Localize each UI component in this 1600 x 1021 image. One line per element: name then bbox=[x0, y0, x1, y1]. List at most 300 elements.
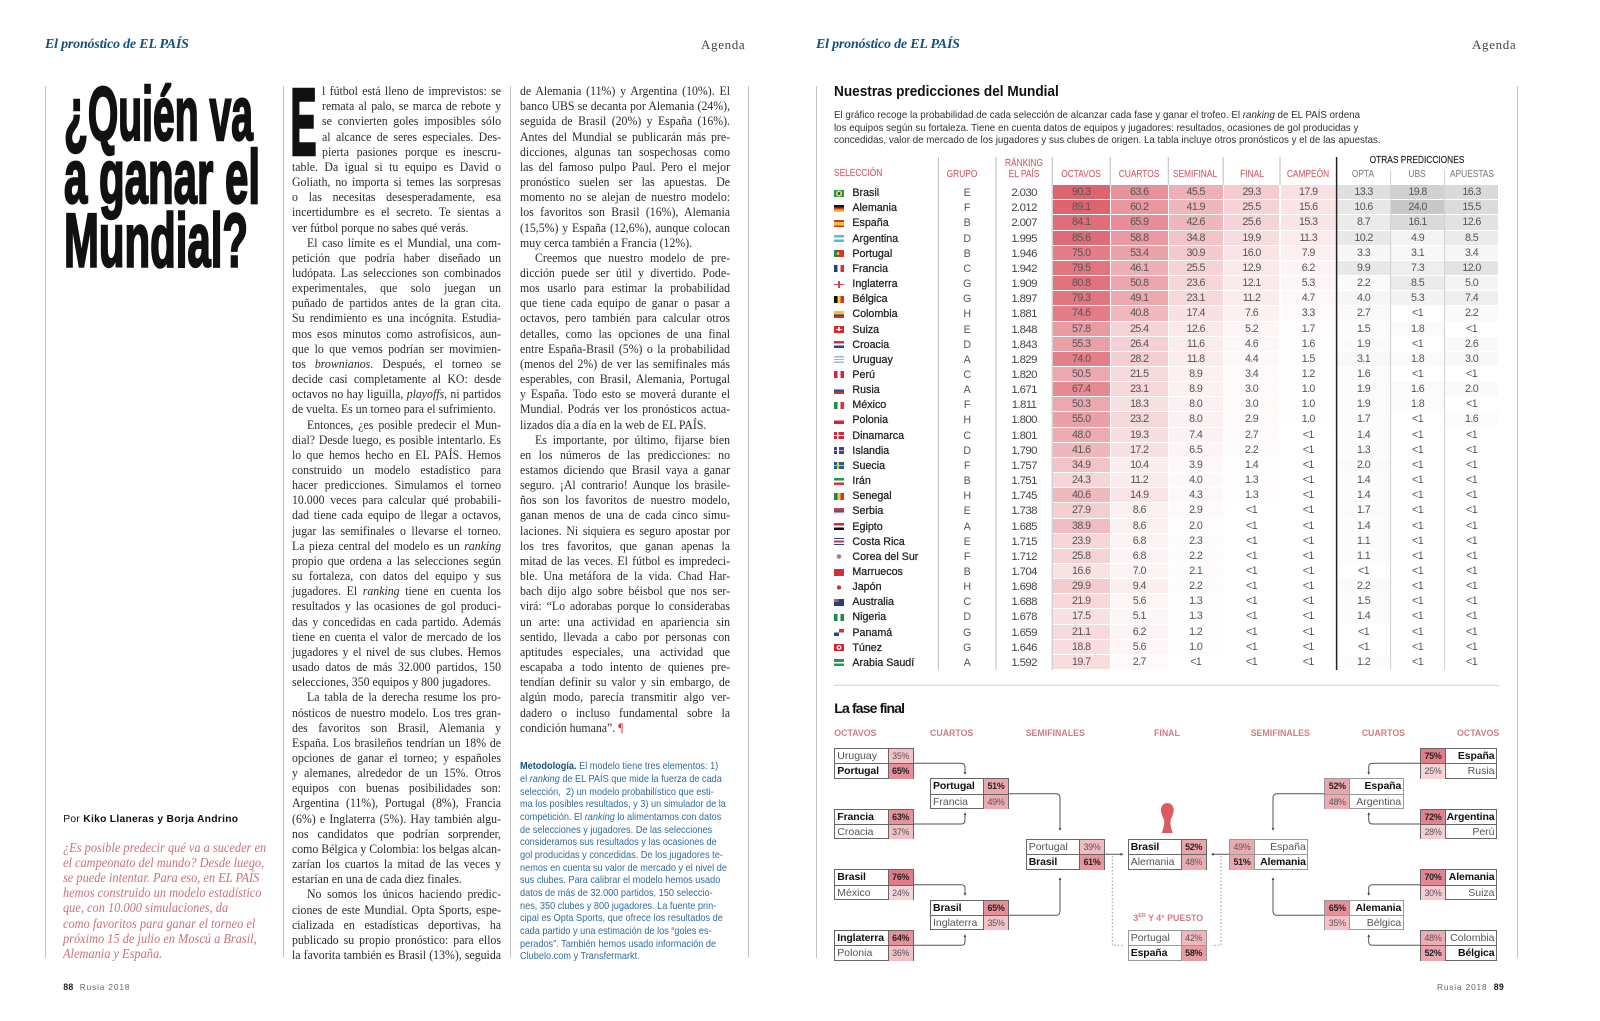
row: Brasil: 19.8 bbox=[1408, 186, 1427, 198]
row: Suiza: 1.5 bbox=[1357, 322, 1370, 334]
row: Bélgica: 4.0 bbox=[1357, 292, 1370, 304]
row: Senegal: 1.3 bbox=[1245, 489, 1258, 501]
article text column 1: jugadores y el nivel de sus clubes. Hemos bbox=[292, 644, 501, 659]
methodology note: de selecciones y jugadores. De las selecciones bbox=[520, 825, 712, 836]
right page folio: Rusia 2018 89 bbox=[1437, 982, 1504, 992]
row: Túnez: G bbox=[963, 642, 971, 654]
row: Irán: B bbox=[964, 475, 971, 487]
arrow: Alemania to final bbox=[1212, 853, 1229, 855]
methodology note: gol producidas y concedidas. De los jugadores te- bbox=[520, 850, 722, 861]
row: Croacia: 26.4 bbox=[1130, 338, 1148, 350]
row: Corea del Sur: 2.2 bbox=[1189, 550, 1202, 562]
intro text in pink italics: Alemania y España. bbox=[63, 947, 163, 962]
row: Portugal: 3.4 bbox=[1465, 247, 1478, 259]
article text column 1: dial? Desde luego, es posible intentarlo. Es bbox=[292, 432, 501, 447]
row: Dinamarca: <1 bbox=[1412, 429, 1423, 441]
row: Suiza: 1.848 bbox=[1011, 324, 1037, 336]
row: España: 12.6 bbox=[1462, 216, 1481, 228]
article text column 2: sentido, llevada a cabo por personas con bbox=[520, 629, 730, 644]
row: Alemania: 24.0 bbox=[1408, 201, 1427, 213]
row: Francia: 7.3 bbox=[1411, 262, 1424, 274]
row: Corea del Sur: <1 bbox=[1303, 550, 1314, 562]
row: Argentina: 11.3 bbox=[1299, 232, 1317, 244]
row: Australia: 1.3 bbox=[1189, 595, 1202, 607]
row: Panamá: G bbox=[963, 627, 971, 639]
row: Colombia: Colombia bbox=[852, 308, 898, 320]
row: Australia bbox=[834, 594, 1478, 608]
row: Inglaterra: 23.6 bbox=[1186, 277, 1205, 289]
match: Portugal vs Francia: Francia bbox=[933, 796, 968, 808]
match: España vs Rusia: 75% bbox=[1424, 751, 1442, 761]
row: Costa Rica: 1.1 bbox=[1357, 535, 1370, 547]
match: Brasil vs Inglaterra: 35% bbox=[987, 918, 1004, 928]
arrow: España loser to third place bbox=[1212, 856, 1221, 945]
match: Uruguay vs Portugal: 65% bbox=[892, 766, 909, 776]
row: Suiza: 12.6 bbox=[1186, 322, 1205, 334]
article text column 1: y alemanes, alrededor de un 15%. Otros bbox=[292, 765, 501, 780]
row: Arabia Saudí: 1.2 bbox=[1357, 656, 1370, 668]
row: Francia: 12.0 bbox=[1462, 262, 1481, 274]
icon: World Cup trophy bbox=[1161, 803, 1174, 833]
row: Senegal: 1.4 bbox=[1357, 489, 1370, 501]
row: Francia bbox=[834, 261, 1498, 275]
match: España vs Argentina: España bbox=[1365, 780, 1401, 792]
row: Suecia: <1 bbox=[1466, 459, 1477, 471]
row: México: 1.811 bbox=[1012, 399, 1036, 411]
match: Portugal vs Brasil: 39% bbox=[1083, 842, 1100, 852]
row: Francia: Francia bbox=[852, 263, 888, 275]
row: Senegal: 40.6 bbox=[1072, 489, 1090, 501]
bracket label: final: FINAL bbox=[1154, 728, 1180, 738]
row: Irán: 4.0 bbox=[1189, 474, 1202, 486]
article text column 1: l fútbol está lleno de imprevistos: se bbox=[322, 83, 501, 98]
article text column 1: zarían los cuartos la mitad de las veces y bbox=[292, 856, 501, 871]
match: Alemania vs Bélgica: 65% bbox=[1329, 903, 1346, 913]
row: España: España bbox=[852, 217, 889, 229]
row: Nigeria: 1.4 bbox=[1357, 610, 1370, 622]
article text column 1: jugadores. El ranking tiene en cuenta los bbox=[292, 583, 501, 598]
row: Nigeria: <1 bbox=[1303, 610, 1314, 622]
match: Argentina vs Perú: Argentina bbox=[1447, 811, 1494, 823]
methodology note: ma los posibles resultados, y 3) un simulador de la bbox=[520, 799, 725, 810]
match: Francia vs Croacia bbox=[834, 809, 914, 839]
row: Suecia: 3.9 bbox=[1189, 459, 1202, 471]
row: Japón: H bbox=[963, 581, 971, 593]
row: Brasil: 16.3 bbox=[1462, 186, 1481, 198]
row: Islandia: 41.6 bbox=[1072, 444, 1090, 456]
row: Marruecos: Marruecos bbox=[852, 566, 903, 578]
row: Panamá: 1.2 bbox=[1189, 626, 1202, 638]
match: Brasil vs Inglaterra: 65% bbox=[987, 903, 1004, 913]
row: Polonia: 1.800 bbox=[1011, 414, 1037, 426]
intro text in pink italics: que, con 10.000 simulaciones, da bbox=[63, 901, 228, 916]
match: Brasil vs México: México bbox=[837, 887, 871, 899]
article text column 1: la favorita también es Brasil (13%), seguida bbox=[292, 947, 501, 962]
article text column 1: petición que podría haber diseñado un bbox=[292, 250, 501, 265]
row: Senegal: Senegal bbox=[852, 490, 892, 502]
match: Uruguay vs Portugal: Portugal bbox=[837, 765, 879, 777]
row: Suecia: <1 bbox=[1412, 459, 1423, 471]
row: Alemania: 15.5 bbox=[1462, 201, 1481, 213]
row: Irán: Irán bbox=[852, 475, 871, 487]
row: Alemania: 25.5 bbox=[1242, 201, 1261, 213]
row: Suiza: 5.2 bbox=[1245, 322, 1258, 334]
row: Islandia: <1 bbox=[1303, 444, 1314, 456]
methodology note: nemos en cuenta su valor de mercado y el nivel de bbox=[520, 863, 726, 874]
row: Argentina: 19.9 bbox=[1242, 232, 1261, 244]
match: third place Portugal vs España: 58% bbox=[1185, 948, 1202, 958]
row: Nigeria: 5.1 bbox=[1133, 610, 1146, 622]
row: Japón: <1 bbox=[1246, 580, 1257, 592]
row: Rusia bbox=[834, 382, 1478, 396]
row: Marruecos: <1 bbox=[1466, 565, 1477, 577]
article text column 1: Su rendimiento es una incógnita. Estudia- bbox=[292, 310, 501, 325]
article text column 1: propio que ordena a las selecciones según bbox=[292, 553, 501, 568]
row: Bélgica: 5.3 bbox=[1411, 292, 1424, 304]
row: Senegal: 1.745 bbox=[1011, 490, 1037, 502]
article text column 1: construido un modelo estadístico para bbox=[292, 462, 501, 477]
methodology note bbox=[520, 761, 727, 962]
row: Argentina: Argentina bbox=[852, 233, 898, 245]
row: Uruguay: 1.8 bbox=[1411, 353, 1424, 365]
row: Bélgica: 79.3 bbox=[1072, 292, 1090, 304]
row: Serbia: 1.738 bbox=[1011, 505, 1037, 517]
arrow: Brasil to final bbox=[1105, 853, 1123, 855]
article text column 1: opciones de ganar el torneo; y españoles bbox=[292, 750, 501, 765]
row: España: 15.3 bbox=[1299, 216, 1317, 228]
row: Colombia: 2.7 bbox=[1357, 307, 1370, 319]
match: Alemania vs Suiza: 30% bbox=[1424, 888, 1442, 898]
row: Portugal: 1.946 bbox=[1011, 248, 1037, 260]
row: Serbia: 27.9 bbox=[1072, 504, 1090, 516]
row: Brasil: E bbox=[964, 187, 971, 199]
match: Brasil vs Inglaterra bbox=[930, 900, 1009, 930]
row: Croacia: Croacia bbox=[852, 339, 889, 351]
article text column 2: ble. Una metáfora de la vida. Chad Har- bbox=[520, 568, 730, 583]
row: Serbia: <1 bbox=[1303, 504, 1314, 516]
methodology note: perados”. También hemos usado información de bbox=[520, 939, 716, 950]
row: Argentina: 8.5 bbox=[1465, 232, 1478, 244]
match: Uruguay vs Portugal: Uruguay bbox=[837, 750, 877, 762]
row: Colombia: 2.2 bbox=[1465, 307, 1478, 319]
row: Francia: 79.5 bbox=[1072, 262, 1090, 274]
row: Argentina: 34.8 bbox=[1186, 232, 1205, 244]
row: España bbox=[834, 215, 1498, 230]
article text column 2: seguro. ¡Al contrario! Aunque los brasile- bbox=[520, 477, 730, 492]
article text column 2: de Alemania (11%) y Argentina (10%). El bbox=[520, 83, 730, 98]
arrow: Portugal loser to third place bbox=[1112, 856, 1123, 945]
row: Islandia: Islandia bbox=[852, 445, 889, 457]
row: Dinamarca: Dinamarca bbox=[852, 430, 904, 442]
match: Brasil vs Inglaterra: Brasil bbox=[933, 902, 961, 914]
predictions table bbox=[834, 185, 1498, 669]
row: Dinamarca: 1.801 bbox=[1011, 430, 1037, 442]
row: Uruguay: 4.4 bbox=[1245, 353, 1258, 365]
match: Alemania vs Bélgica: Alemania bbox=[1355, 902, 1401, 914]
left page running head: El pronóstico de EL PAÍS bbox=[45, 36, 189, 52]
row: Irán bbox=[834, 473, 1478, 487]
row: Polonia: 1.6 bbox=[1465, 413, 1478, 425]
article text column 1: octavos no hay liguilla, playoffs, ni partidos bbox=[292, 386, 501, 401]
match: Alemania vs Suiza: 70% bbox=[1424, 872, 1442, 882]
methodology note: Clubelo.com y Transfermarkt. bbox=[520, 951, 639, 962]
row: Perú: Perú bbox=[852, 369, 875, 381]
article text column 2: pronóstico suelen ser las apuestas. De bbox=[520, 174, 730, 189]
row: Alemania: 15.6 bbox=[1299, 201, 1317, 213]
article text column 1: table. Da igual si tu equipo es David o bbox=[292, 159, 501, 174]
article text column 1: puñado de partidos antes de la gran cita. bbox=[292, 295, 501, 310]
row: Bélgica: 11.2 bbox=[1243, 292, 1260, 304]
row: Irán: <1 bbox=[1303, 474, 1314, 486]
row: México: 1.0 bbox=[1302, 398, 1315, 410]
row: Costa Rica: 2.3 bbox=[1189, 535, 1202, 547]
row: Colombia: H bbox=[963, 308, 971, 320]
row: Croacia: 1.6 bbox=[1302, 338, 1315, 350]
match: Uruguay vs Portugal: 35% bbox=[892, 751, 909, 761]
row: México: 3.0 bbox=[1245, 398, 1258, 410]
row: Uruguay: 3.0 bbox=[1465, 353, 1478, 365]
row: Nigeria: D bbox=[963, 611, 971, 623]
row: España: 65.9 bbox=[1130, 216, 1148, 228]
row: México bbox=[834, 397, 1478, 411]
row: Perú: 50.5 bbox=[1072, 368, 1090, 380]
row: Costa Rica: E bbox=[964, 536, 971, 548]
table description: concedidas, valor de mercado de los jugadores y sus clubes de origen. La tabla incluye otros pronósticos y el de las apuestas. bbox=[834, 134, 1381, 146]
row: Suecia: 10.4 bbox=[1130, 459, 1148, 471]
row: Australia: <1 bbox=[1303, 595, 1314, 607]
article text column 1: remata al palo, se marca de rebote y bbox=[322, 98, 501, 113]
article text column 2 bbox=[520, 83, 730, 735]
article text column 2: ños son los favoritos de nuestro modelo, bbox=[520, 492, 730, 507]
row: Marruecos: 7.0 bbox=[1133, 565, 1146, 577]
row: México: 1.9 bbox=[1357, 398, 1370, 410]
row: Egipto: A bbox=[964, 521, 971, 533]
article text column 2: muy cerca también a Francia (12%). bbox=[520, 235, 692, 250]
row: Costa Rica: <1 bbox=[1466, 535, 1477, 547]
row: Australia: C bbox=[963, 596, 971, 608]
intro text in pink italics: el campeonato del mundo? Desde luego, bbox=[63, 856, 264, 871]
article text column 1: El caso límite es el Mundial, una com- bbox=[307, 235, 501, 250]
row: Australia: 1.688 bbox=[1011, 596, 1037, 608]
row: Bélgica: 49.1 bbox=[1130, 292, 1148, 304]
match: Inglaterra vs Polonia bbox=[834, 930, 914, 961]
match: third place Portugal vs España bbox=[1128, 930, 1207, 961]
row: México: <1 bbox=[1466, 398, 1477, 410]
arrow: España to quarter-final bbox=[1369, 763, 1420, 774]
row: Bélgica: 4.7 bbox=[1302, 292, 1315, 304]
row: Senegal: <1 bbox=[1303, 489, 1314, 501]
row: Inglaterra: 50.8 bbox=[1130, 277, 1148, 289]
match: Colombia vs Bélgica: 48% bbox=[1424, 933, 1442, 943]
match: Colombia vs Bélgica bbox=[1420, 930, 1497, 961]
match: Francia vs Croacia: Croacia bbox=[837, 826, 873, 838]
row: Japón: 2.2 bbox=[1189, 580, 1202, 592]
row: Arabia Saudí bbox=[834, 655, 1499, 670]
match: Inglaterra vs Polonia: Inglaterra bbox=[837, 932, 884, 944]
row: Inglaterra: 80.8 bbox=[1072, 277, 1090, 289]
row: Uruguay: 74.0 bbox=[1072, 353, 1090, 365]
row: Panamá: <1 bbox=[1466, 626, 1477, 638]
article text column 1: incertidumbre es el secreto. Te sientas a bbox=[292, 204, 501, 219]
row: Marruecos: 1.704 bbox=[1011, 566, 1037, 578]
row: Perú: <1 bbox=[1412, 368, 1423, 380]
row: Suecia: 1.757 bbox=[1011, 460, 1037, 472]
article text column 1: ludópata. Las selecciones son combinados bbox=[292, 265, 501, 280]
table column headers: SELECCIÓN bbox=[834, 168, 883, 179]
row: Australia: 1.5 bbox=[1357, 595, 1370, 607]
article text column 1: 10.000 veces para calcular qué probabili- bbox=[292, 492, 501, 507]
article text column 2: bach dijo algo sobre béisbol que nos ser- bbox=[520, 583, 730, 598]
article text column 1: estarían en una de cada diez finales. bbox=[292, 871, 462, 886]
row: Croacia bbox=[834, 337, 1478, 351]
byline: Por Kiko Llaneras y Borja Andrino bbox=[63, 814, 238, 825]
row: España: 2.007 bbox=[1011, 217, 1037, 229]
row: Túnez: <1 bbox=[1303, 641, 1314, 653]
row: Alemania: 2.012 bbox=[1011, 202, 1037, 214]
row: Argentina: D bbox=[963, 233, 971, 245]
article text column 1: lo que hemos hecho en EL PAÍS. Hemos bbox=[292, 447, 501, 462]
match: España vs Alemania: España bbox=[1270, 841, 1306, 853]
row: Dinamarca: 19.3 bbox=[1130, 429, 1148, 441]
row: Croacia: D bbox=[963, 339, 971, 351]
match: España vs Argentina: 48% bbox=[1329, 797, 1346, 807]
row: Islandia: 1.3 bbox=[1357, 444, 1370, 456]
match: Portugal vs Francia: 49% bbox=[987, 797, 1004, 807]
article text column 1: su fortaleza, con datos del equipo y sus bbox=[292, 568, 501, 583]
row: Túnez: <1 bbox=[1246, 641, 1257, 653]
row: Corea del Sur: F bbox=[964, 551, 970, 563]
row: Inglaterra: 8.5 bbox=[1411, 277, 1424, 289]
match: España vs Argentina: Argentina bbox=[1356, 796, 1401, 808]
row: Uruguay: 28.2 bbox=[1130, 353, 1148, 365]
row: México: 8.0 bbox=[1189, 398, 1202, 410]
row: Islandia: 1.790 bbox=[1011, 445, 1037, 457]
article text column 2: mos usarlo para estimar la probabilidad bbox=[520, 280, 730, 295]
table title: Nuestras predicciones del Mundial bbox=[834, 83, 1059, 100]
row: Suecia: 34.9 bbox=[1072, 459, 1090, 471]
row: Túnez: <1 bbox=[1412, 641, 1423, 653]
article text column 2: estamos diciendo que Brasil vaya a ganar bbox=[520, 462, 730, 477]
match: Alemania vs Suiza: Suiza bbox=[1468, 887, 1494, 899]
match: Alemania vs Suiza: Alemania bbox=[1449, 871, 1494, 883]
row: Inglaterra: 1.909 bbox=[1011, 278, 1037, 290]
row: Islandia: 2.2 bbox=[1245, 444, 1258, 456]
row: Australia: 5.6 bbox=[1133, 595, 1146, 607]
row: Panamá: <1 bbox=[1358, 626, 1369, 638]
intro text in pink italics: próximo 15 de julio en Moscú a Brasil, bbox=[63, 932, 257, 947]
methodology note: cada partido y una estimación de los “goles es- bbox=[520, 926, 711, 937]
article text column 1: ciones de este Mundial. Opta Sports, espe- bbox=[292, 902, 501, 917]
row: Perú: 1.2 bbox=[1302, 368, 1315, 380]
row: Argentina: 4.9 bbox=[1411, 232, 1424, 244]
row: Rusia: Rusia bbox=[852, 384, 880, 396]
table description: El gráfico recoge la probabilidad de cada selección de alcanzar cada fase y ganar el trofeo. El ranking de EL PAÍS ordena bbox=[834, 109, 1360, 121]
row: Rusia: A bbox=[964, 384, 971, 396]
row: Senegal: 14.9 bbox=[1130, 489, 1148, 501]
row: Polonia: 2.9 bbox=[1245, 413, 1258, 425]
article text column 2: seguida de Brasil (20%) y España (16%). bbox=[520, 113, 730, 128]
match: final Brasil vs Alemania: Brasil bbox=[1131, 841, 1159, 853]
row: Costa Rica: <1 bbox=[1303, 535, 1314, 547]
row: Croacia: <1 bbox=[1412, 338, 1423, 350]
match: Francia vs Croacia: Francia bbox=[837, 811, 874, 823]
row: España: 16.1 bbox=[1408, 216, 1427, 228]
row: Croacia: 11.6 bbox=[1187, 338, 1205, 350]
row: Marruecos: <1 bbox=[1412, 565, 1423, 577]
article text column 1: España. Los brasileños tendrían un 18% de bbox=[292, 735, 501, 750]
row: España: 42.6 bbox=[1186, 216, 1205, 228]
article text column 1: La tabla de la derecha resume los pro- bbox=[307, 689, 501, 704]
methodology note: consideramos sus resultados y las ocasiones de bbox=[520, 837, 716, 848]
row: México: México bbox=[852, 399, 886, 411]
row: Corea del Sur: 1.1 bbox=[1357, 550, 1370, 562]
row: España: 84.1 bbox=[1072, 216, 1090, 228]
article text column 2: ganan menos de una de cada cinco simu- bbox=[520, 507, 730, 522]
row: Arabia Saudí: 19.7 bbox=[1072, 656, 1090, 668]
article text column 1: decide casi completamente al KO: desde bbox=[292, 371, 501, 386]
methodology note: nes, 350 clubes y 800 jugadores. La fuente prin- bbox=[520, 901, 716, 912]
row: Egipto: 8.6 bbox=[1133, 520, 1146, 532]
row: Túnez: 5.6 bbox=[1133, 641, 1146, 653]
article text column 1: al alcance de seres especiales. Des- bbox=[322, 129, 501, 144]
row: Alemania bbox=[834, 200, 1498, 214]
article text column 2: dadero o incluso fundamental sobre la bbox=[520, 704, 730, 720]
row: Serbia bbox=[834, 503, 1478, 518]
article text column 2: Antes del Mundial se publicarán más pre- bbox=[520, 129, 730, 144]
table column headers bbox=[834, 155, 1494, 180]
row: Suiza: E bbox=[964, 324, 971, 336]
row: Irán: 1.751 bbox=[1011, 475, 1037, 487]
row: México: 1.8 bbox=[1411, 398, 1424, 410]
right page section label: Agenda bbox=[1472, 37, 1516, 52]
arrow: Francia to quarter-final bbox=[914, 813, 965, 824]
arrow: Argentina to quarter-final bbox=[1369, 813, 1420, 824]
row: Rusia: 1.0 bbox=[1302, 383, 1315, 395]
row: Irán: 11.2 bbox=[1130, 474, 1148, 486]
article text column 1: equipos con buenas posibilidades son: bbox=[292, 780, 501, 795]
table column headers: CUARTOS bbox=[1119, 169, 1159, 180]
row: Túnez: Túnez bbox=[852, 642, 882, 654]
article text column 1 bbox=[292, 83, 501, 962]
article text column 2: laciones. Ni siquiera es seguro apostar por bbox=[520, 523, 730, 538]
row: Brasil: 45.5 bbox=[1186, 186, 1205, 198]
methodology note: sus clubes. Para calibrar el modelo hemos usado bbox=[520, 875, 720, 886]
table column headers: GRUPO bbox=[947, 169, 978, 180]
row: Nigeria: <1 bbox=[1466, 610, 1477, 622]
article text column 1: nos candidatos que podrían sorprender, bbox=[292, 826, 501, 841]
row: México: F bbox=[964, 399, 970, 411]
article text column 1: publicado su propio pronóstico: para ellos bbox=[292, 932, 501, 947]
row: Croacia: 55.3 bbox=[1072, 338, 1090, 350]
arrow: Alemania to semi-final bbox=[1273, 878, 1324, 915]
row: Croacia: 1.9 bbox=[1357, 338, 1370, 350]
row: Costa Rica: 1.715 bbox=[1011, 536, 1037, 548]
row: Perú bbox=[834, 367, 1478, 381]
article text column 1: resultados y las ocasiones de gol produci- bbox=[292, 598, 501, 613]
article text column 2: Creemos que nuestro modelo de pre- bbox=[535, 250, 730, 265]
row: Túnez: 1.0 bbox=[1189, 641, 1202, 653]
row: Uruguay: 3.1 bbox=[1357, 353, 1370, 365]
row: Alemania: 41.9 bbox=[1186, 201, 1205, 213]
article text column 1: Entonces, ¿es posible predecir el Mun- bbox=[307, 417, 501, 432]
article text column 1: das y concedidas en cada partido. Además bbox=[292, 614, 501, 629]
row: Croacia: 2.6 bbox=[1465, 338, 1478, 350]
methodology note: competición. El ranking lo alimentamos con datos bbox=[520, 812, 721, 823]
row: Portugal bbox=[834, 246, 1478, 260]
row: Portugal: 30.9 bbox=[1186, 247, 1205, 259]
row: Marruecos bbox=[834, 564, 1478, 578]
methodology note: Metodología. El modelo tiene tres elementos: 1) bbox=[520, 761, 718, 772]
